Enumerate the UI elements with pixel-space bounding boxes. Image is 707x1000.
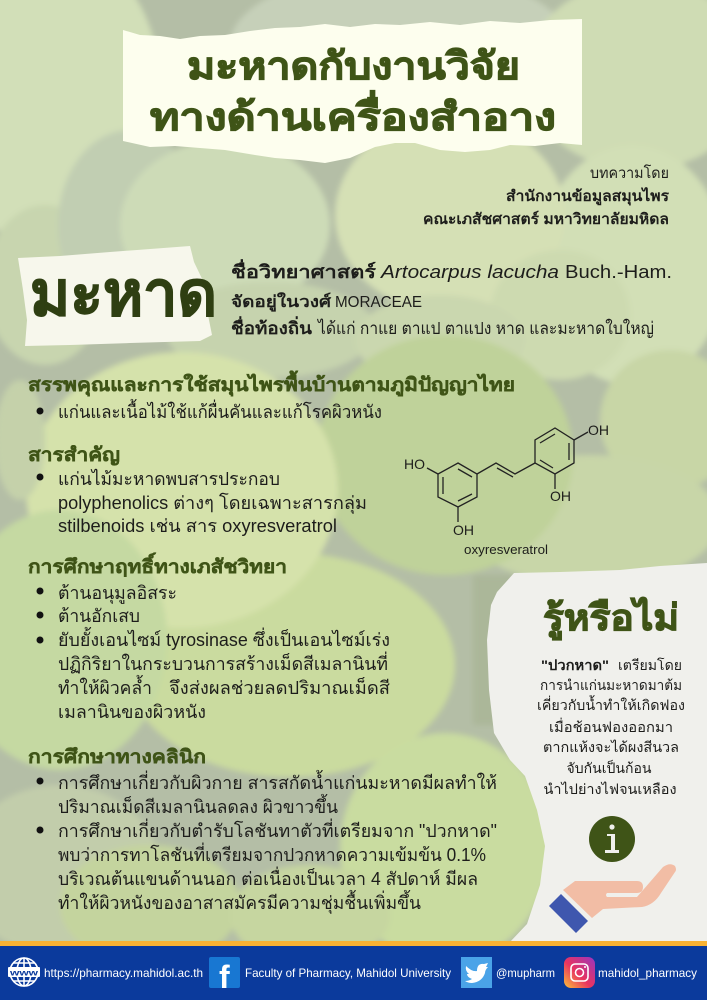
section: key compounds: polyphenolics ต่างๆ โดยเฉพาะสารกลุ่ม: [58, 492, 367, 514]
callout body: เตรียมโดย: [618, 657, 682, 673]
botanical info: ชื่อวิทยาศาสตร์: [231, 259, 376, 282]
title paper: [123, 19, 582, 163]
article credit: [423, 164, 670, 228]
section: clinical studies: การศึกษาทางคลินิก: [28, 746, 206, 768]
icon: facebook: f: [219, 959, 230, 995]
title text: มะหาดกับงานวิจัย: [187, 46, 520, 88]
article credit: บทความโดย: [590, 164, 669, 182]
plant name label: มะหาด: [30, 260, 217, 329]
chemical structure: oxyresveratrol: oxyresveratrol: [464, 542, 548, 557]
botanical info: Artocarpus lacucha: [380, 262, 559, 282]
section: traditional use: สรรพคุณและการใช้สมุนไพรพื้นบ้านตามภูมิปัญญาไทย: [28, 370, 515, 397]
section: clinical studies: ทำให้ผิวหนังของอาสาสมัครมีความชุ่มชื้นเพิ่มขึ้น: [58, 890, 421, 914]
callout body: การนำแก่นมะหาดมาต้ม: [540, 677, 682, 693]
title text: [150, 46, 556, 139]
section: pharmacology: ปฏิกิริยาในกระบวนการสร้างเม็ดสีเมลานินที่: [58, 651, 388, 674]
twitter handle: @mupharm: [496, 966, 555, 980]
website link: https://pharmacy.mahidol.ac.th: [44, 966, 203, 980]
chemical structure: oxyresveratrol: OH: [550, 488, 571, 504]
section: pharmacology: [28, 552, 390, 722]
instagram handle: mahidol_pharmacy: [598, 966, 697, 980]
chemical structure: oxyresveratrol: [404, 422, 609, 557]
chemical structure: oxyresveratrol: OH: [588, 422, 609, 438]
section: clinical studies: การศึกษาเกี่ยวกับผิวกาย สารสกัดน้ำแก่นมะหาดมีผลทำให้: [58, 770, 497, 793]
botanical info: จัดอยู่ในวงศ์: [231, 292, 332, 313]
botanical info: MORACEAE: [335, 294, 422, 311]
footer: [0, 941, 707, 1000]
callout body: เคี่ยวกับน้ำทำให้เกิดฟอง: [537, 695, 685, 713]
callout body: ตากแห้งจะได้ผงสีนวล: [543, 739, 679, 755]
callout body: [537, 657, 685, 797]
icon: facebook: [209, 957, 240, 995]
icon: hand: [549, 864, 676, 933]
icon: web globe: www: [9, 968, 39, 978]
section: traditional use: แก่นและเนื้อไม้ใช้แก้ผื่นคันและแก้โรคผิวหนัง: [58, 399, 382, 422]
callout body: จับกันเป็นก้อน: [566, 759, 652, 776]
section: pharmacology: จึงส่งผลช่วยลดปริมาณเม็ดสี: [169, 676, 390, 698]
article credit: คณะเภสัชศาสตร์ มหาวิทยาลัยมหิดล: [423, 210, 669, 228]
facebook name: Faculty of Pharmacy, Mahidol University: [245, 966, 451, 980]
section: key compounds: แก่นไม้มะหาดพบสารประกอบ: [58, 468, 280, 489]
callout body: นำไปย่างไฟจนเหลือง: [544, 781, 676, 797]
icon: information: [589, 816, 635, 862]
section: pharmacology: ยับยั้งเอนไซม์ tyrosinase ซึ่งเป็นเอนไซม์เร่ง: [58, 627, 390, 650]
botanical info: ชื่อท้องถิ่น: [231, 316, 312, 338]
section: clinical studies: การศึกษาเกี่ยวกับตำรับโลชันทาตัวที่เตรียมจาก "ปวกหาด": [58, 818, 497, 841]
callout body: "ปวกหาด": [541, 657, 609, 673]
botanical info: [231, 259, 672, 338]
section: key compounds: สารสำคัญ: [28, 445, 120, 466]
section: pharmacology: การศึกษาฤทธิ์ทางเภสัชวิทยา: [28, 552, 287, 578]
panel: did you know: [487, 563, 707, 942]
plant name label: [18, 246, 217, 346]
section: pharmacology: เมลานินของผิวหนัง: [58, 702, 206, 722]
section: pharmacology: ทำให้ผิวคล้ำ: [58, 675, 152, 698]
callout heading: รู้หรือไม่: [543, 596, 679, 641]
icon: twitter: [461, 957, 492, 988]
chemical structure: oxyresveratrol: HO: [404, 456, 425, 472]
section: clinical studies: บริเวณต้นแขนด้านนอก ต่อเนื่องเป็นเวลา 4 สัปดาห์ มีผล: [58, 866, 478, 889]
icon: instagram: [564, 957, 595, 988]
section: key compounds: [28, 445, 367, 536]
chemical structure: oxyresveratrol: OH: [453, 522, 474, 538]
section: clinical studies: [28, 746, 497, 914]
section: clinical studies: พบว่าการทาโลชันที่เตรียมจากปวกหาดความเข้มข้น 0.1%: [58, 842, 486, 865]
title text: ทางด้านเครื่องสำอาง: [150, 90, 556, 139]
section: key compounds: stilbenoids เช่น สาร oxyresveratrol: [58, 516, 337, 536]
section: pharmacology: ต้านอักเสบ: [58, 606, 140, 626]
article credit: สำนักงานข้อมูลสมุนไพร: [506, 186, 670, 206]
icon: web globe: [8, 958, 40, 986]
section: clinical studies: ปริมาณเม็ดสีเมลานินลดลง ผิวขาวขึ้น: [58, 794, 338, 817]
botanical info: Buch.-Ham.: [565, 262, 672, 282]
section: pharmacology: ต้านอนุมูลอิสระ: [58, 583, 177, 604]
section: traditional use: [28, 370, 515, 422]
callout body: เมื่อช้อนฟองออกมา: [549, 718, 673, 735]
botanical info: ได้แก่ กาแย ตาแป ตาแปง หาด และมะหาดใบใหญ่: [316, 318, 654, 338]
